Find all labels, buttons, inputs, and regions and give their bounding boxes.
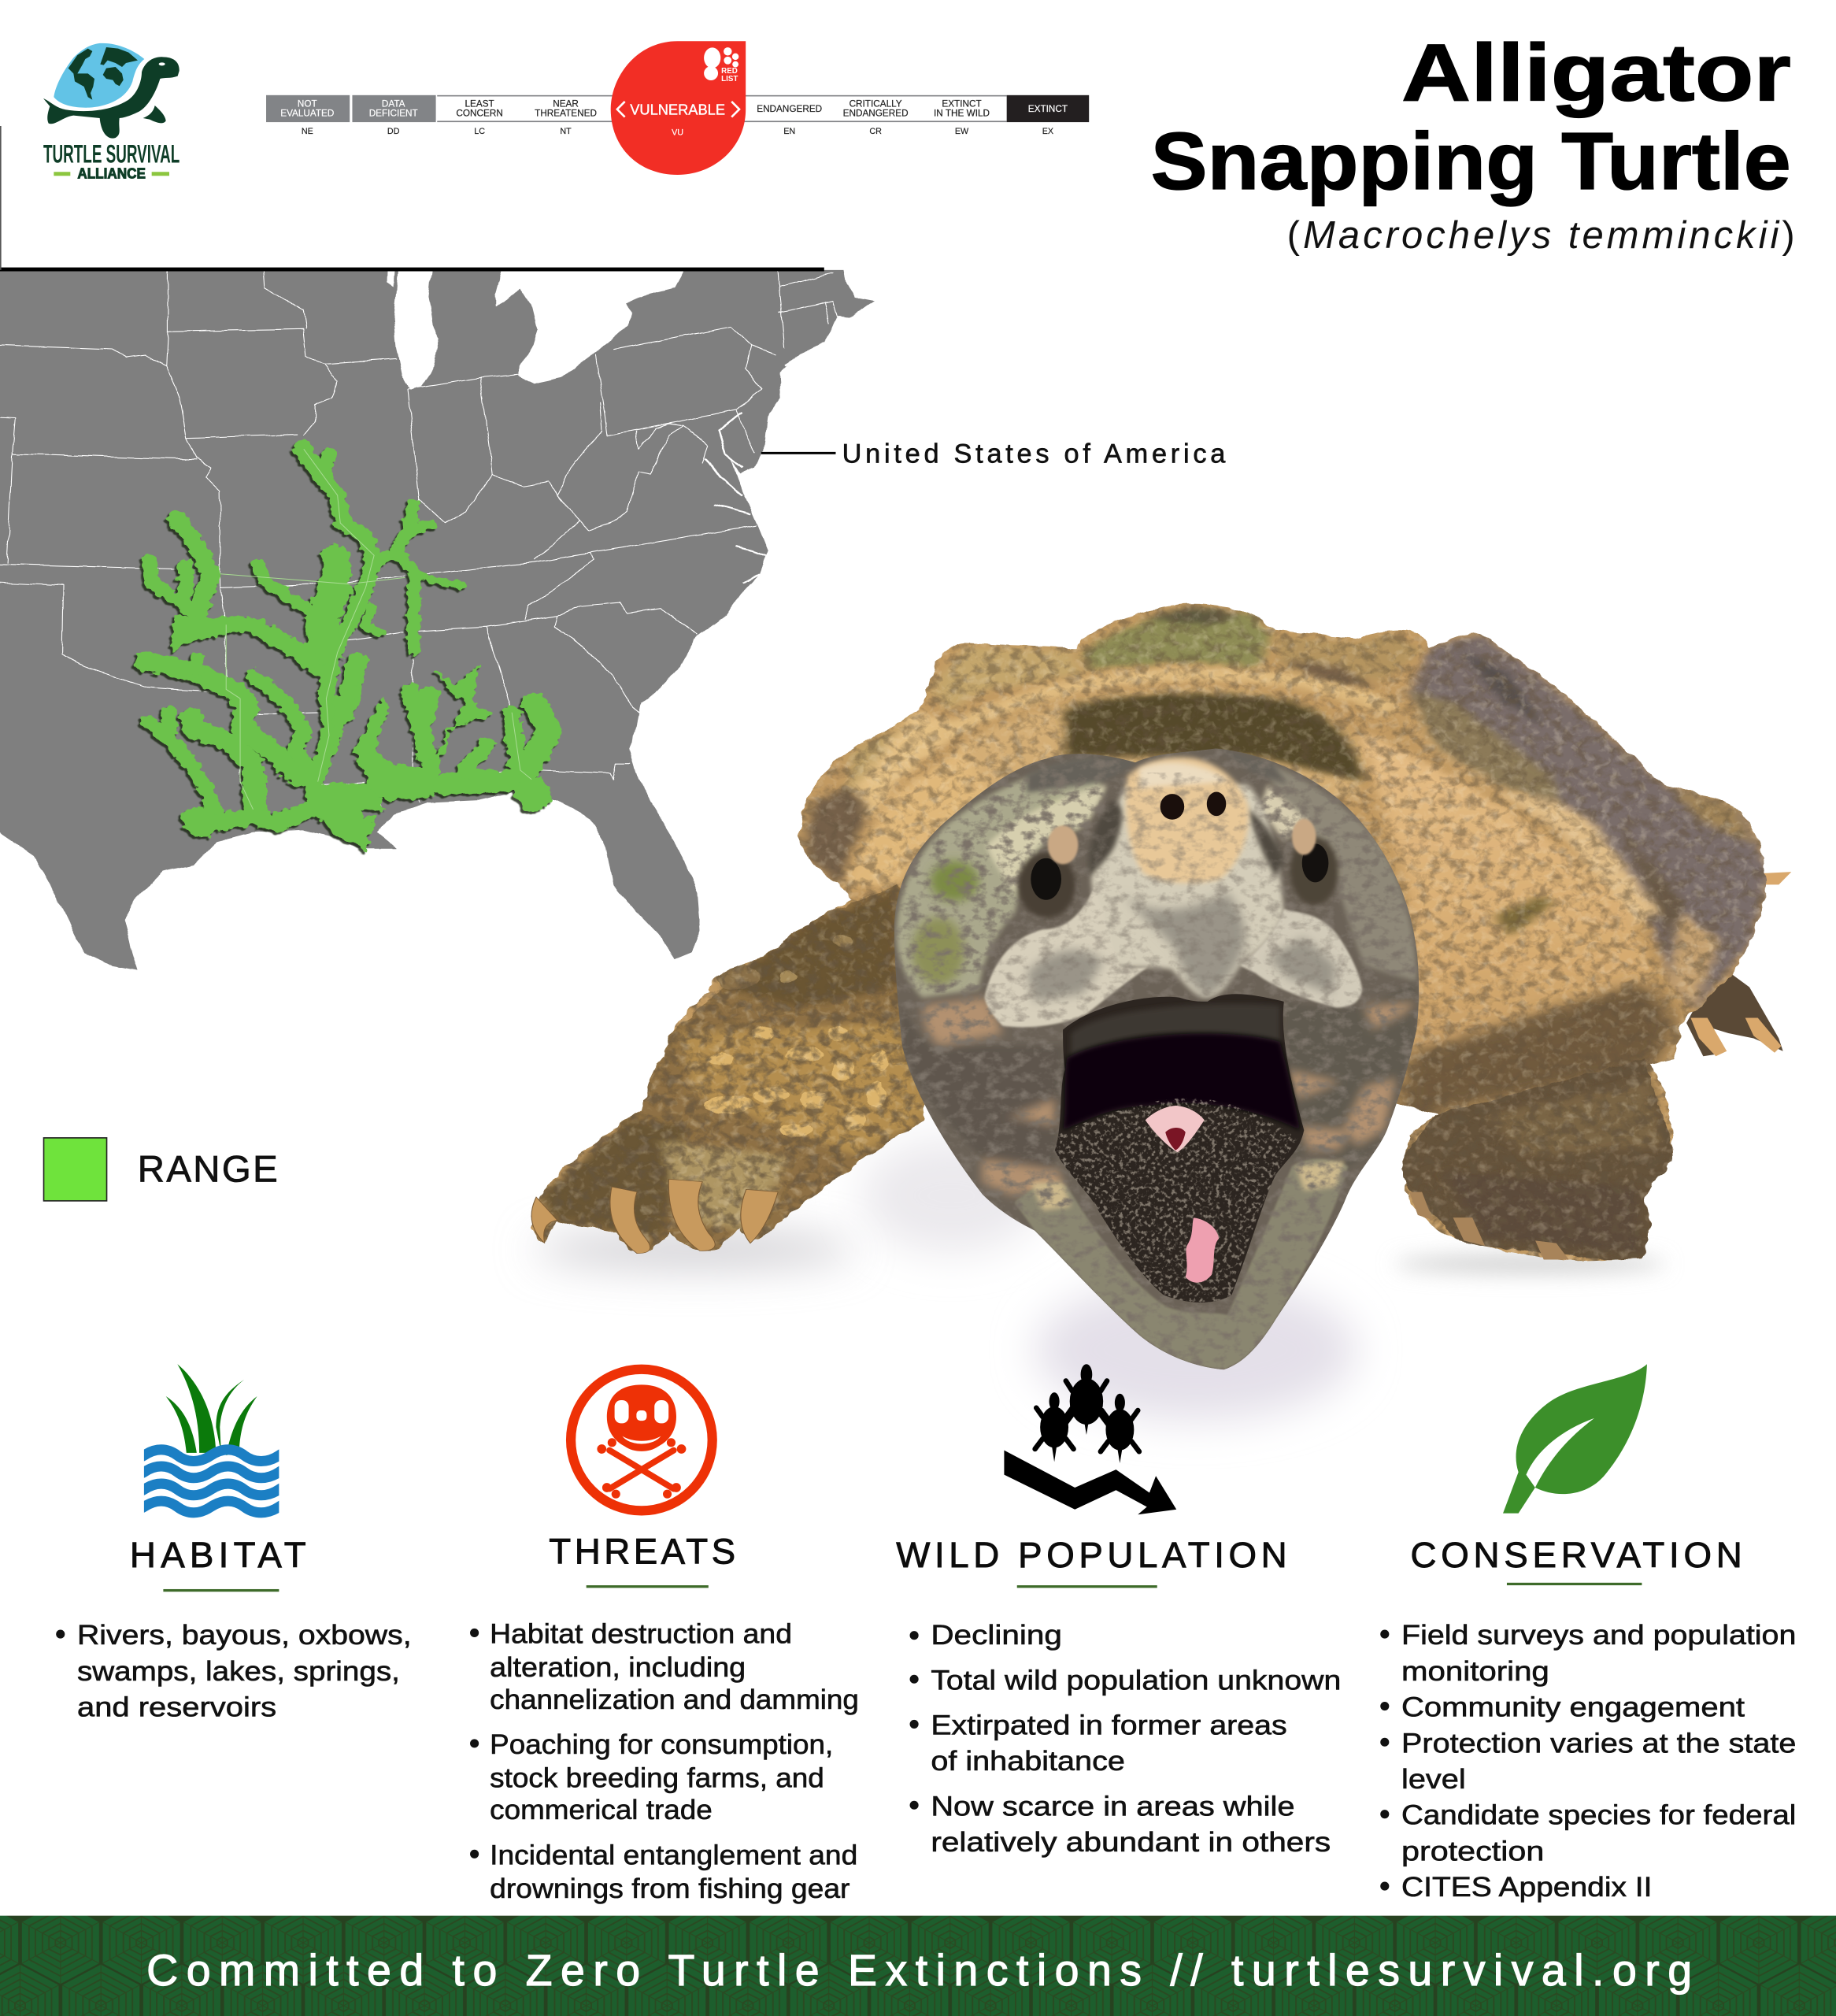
lure [1146,1106,1205,1152]
right foot claws [1409,1192,1569,1259]
threats bullets: alteration, including [490,1652,746,1683]
algae patches [912,804,1083,985]
logo: Turtle Survival Alliance [43,43,180,182]
left hood plates [896,761,1101,998]
codes row: DD [387,127,400,136]
heading: conservation: CONSERVATION [1410,1535,1742,1575]
least concern: LEAST [465,99,494,109]
rim tan corners [1031,1160,1344,1210]
left edge line [0,126,2,270]
title: Snapping Turtle [1151,116,1791,206]
codes row: EW [955,127,969,136]
codes row: CR [869,127,882,136]
left rim [805,710,964,884]
heading: habitat: HABITAT [130,1535,306,1575]
footer slogan: Committed to Zero Turtle Extinctions // turtlesurvival.org [146,1946,1692,1995]
threats bullets: Habitat destruction and [490,1619,792,1650]
left leg tones [536,890,931,1238]
icon: water and grass [128,1364,303,1513]
conservation bullets: CITES Appendix II [1401,1872,1652,1903]
map: United States range map [0,246,875,971]
habitat bullets [56,1620,412,1723]
mouth [1055,994,1304,1303]
right leg tones [1443,1080,1661,1254]
range: green river basins [146,447,549,849]
least concern: CONCERN [456,109,503,119]
logo subline: ALLIANCE [77,165,146,182]
snout cream top [1139,762,1227,788]
snout [1126,758,1249,883]
extinct [1007,95,1089,122]
codes row: EX [1042,127,1053,136]
turtle head [866,724,1496,1388]
carapace back [1409,634,1771,1010]
conservation bullets: Protection varies at the state [1401,1728,1796,1758]
title [1151,27,1791,206]
map label: United States of America: United States of America [842,439,1226,469]
conservation bullets: Community engagement [1401,1692,1745,1723]
not evaluated: NOT [298,99,317,109]
left forehead cream [986,784,1107,893]
conservation column [1380,1364,1796,1903]
wild population bullets [910,1620,1341,1858]
chevrons [617,102,739,117]
mouth floor speckle [1055,1098,1304,1307]
pale river lines inside range [220,449,531,810]
head base [866,724,1496,1388]
mouth dark core [1063,1033,1300,1130]
right leg base [1393,1059,1678,1264]
right jaw dark [1283,981,1416,1170]
wild population bullets: relatively abundant in others [931,1827,1331,1858]
white band rules [437,95,1007,122]
dark arch centre [1065,694,1363,782]
wild population column [896,1364,1341,1858]
near threatened: NEAR [553,99,579,109]
tongue [1186,1217,1219,1283]
logo shell [54,43,144,108]
logo continents [68,47,138,100]
legend: range: RANGE [138,1148,278,1190]
conservation bullets: Candidate species for federal [1401,1800,1796,1831]
habitat bullets: and reservoirs [77,1692,276,1723]
conservation bullets: Field surveys and population [1401,1620,1796,1651]
heading: threats: THREATS [549,1531,735,1571]
wild population bullets: Extirpated in former areas [931,1710,1287,1740]
not evaluated: EVALUATED [280,109,334,119]
rule above the map [0,268,824,271]
clipped body painting [520,583,1804,1269]
body lower dark mottling [1393,982,1678,1141]
wild population bullets: Now scarce in areas while [931,1791,1294,1821]
conservation bullets [1380,1620,1796,1903]
codes row: NE [302,127,313,136]
jaw tan blotches [922,998,1416,1195]
extra leg texture [520,583,1804,1269]
legend: range [44,1138,278,1201]
heading: wild population: WILD POPULATION [896,1535,1287,1575]
red list logo: LIST [721,75,738,83]
right lobe [1240,910,1362,1008]
codes row: VU [672,128,683,137]
codes row: EN [783,127,795,136]
rim inner highlight [939,674,1393,736]
left lobe [985,885,1147,1027]
arch under shell [956,687,1368,798]
land, lakes and state lines [0,246,875,971]
scientific name: (Macrochelys temminckii) [1287,214,1795,257]
extinct in the wild: EXTINCT [942,99,982,109]
eyes [1018,819,1338,918]
left leg base [520,884,956,1258]
icon: turtles and declining arrow [1004,1364,1176,1514]
critically endangered: ENDANGERED [843,109,909,119]
threats bullets: channelization and damming [490,1684,859,1715]
right rim band [1409,693,1686,937]
top dark arcs [1027,749,1288,793]
icon: skull and crossbones [571,1369,713,1510]
habitat bullets: Rivers, bayous, oxbows, [77,1620,412,1651]
light texture [520,583,1804,1269]
red list logo: RED [721,67,738,76]
lobe grey shading [1027,893,1336,1002]
data deficient: DEFICIENT [369,109,418,119]
threats bullets: Poaching for consumption, [490,1729,833,1760]
turtle body, shell and legs [520,583,1804,1269]
body flesh right [1359,731,1674,1141]
left foot claws [531,1179,778,1254]
dark texture [520,583,1804,1269]
wild population bullets: of inhabitance [931,1746,1125,1777]
threats bullets [470,1619,859,1904]
near threatened: THREATENED [535,109,597,119]
extinct: EXTINCT [1028,104,1068,114]
not evaluated [266,95,350,122]
wild population bullets: Declining [931,1620,1062,1651]
red list status scale [266,41,1089,175]
red list logo [704,47,738,83]
threats column [470,1369,859,1904]
logo eye [159,62,165,65]
footer banner [0,1916,1836,2016]
threats bullets: commerical trade [490,1795,713,1825]
conservation bullets: level [1401,1764,1466,1795]
vulnerable label: VULNERABLE [630,101,725,117]
mouth roof [1071,1004,1280,1062]
red vulnerable marker [611,41,746,175]
habitat column [56,1364,412,1723]
left jaw dark [902,1006,1063,1172]
dark eye streaks [1088,801,1284,877]
top rim [931,607,1422,710]
wild population bullets: Total wild population unknown [931,1665,1341,1695]
conservation bullets: monitoring [1401,1656,1549,1687]
habitat bullets: swamps, lakes, springs, [77,1656,400,1687]
turtle soft shadows [534,1138,1665,1421]
shell base [520,583,1804,1269]
codes row: LC [474,127,485,136]
clipped head painting [866,724,1496,1388]
data deficient [352,95,436,122]
rear leg and claws [1686,872,1791,1056]
codes row [302,127,1053,137]
extinct in the wild: IN THE WILD [934,109,990,119]
critically endangered: CRITICALLY [850,99,902,109]
logo turtle body [43,57,180,139]
back stripes [1460,649,1753,1007]
forehead pale [1091,784,1284,998]
threats bullets: Incidental entanglement and [490,1840,857,1870]
endangered: ENDANGERED [757,104,822,114]
nostrils [1160,792,1226,820]
right forehead cream [1260,784,1308,841]
lower jaw rim [1015,1158,1348,1369]
neck flesh left [842,747,990,884]
title: Alligator [1401,27,1791,117]
data deficient: DATA [382,99,405,109]
threats bullets: stock breeding farms, and [490,1762,824,1793]
codes row: NT [560,127,572,136]
icon: leaf [1503,1364,1647,1514]
logo wordmark: TURTLE SURVIVAL [43,139,180,169]
right hood [1260,761,1416,981]
left leg nodules [704,935,889,1137]
threats bullets: drownings from fishing gear [490,1873,850,1904]
face grey texture [967,773,1388,1021]
head dark texture [866,724,1496,1388]
conservation bullets: protection [1401,1836,1544,1866]
